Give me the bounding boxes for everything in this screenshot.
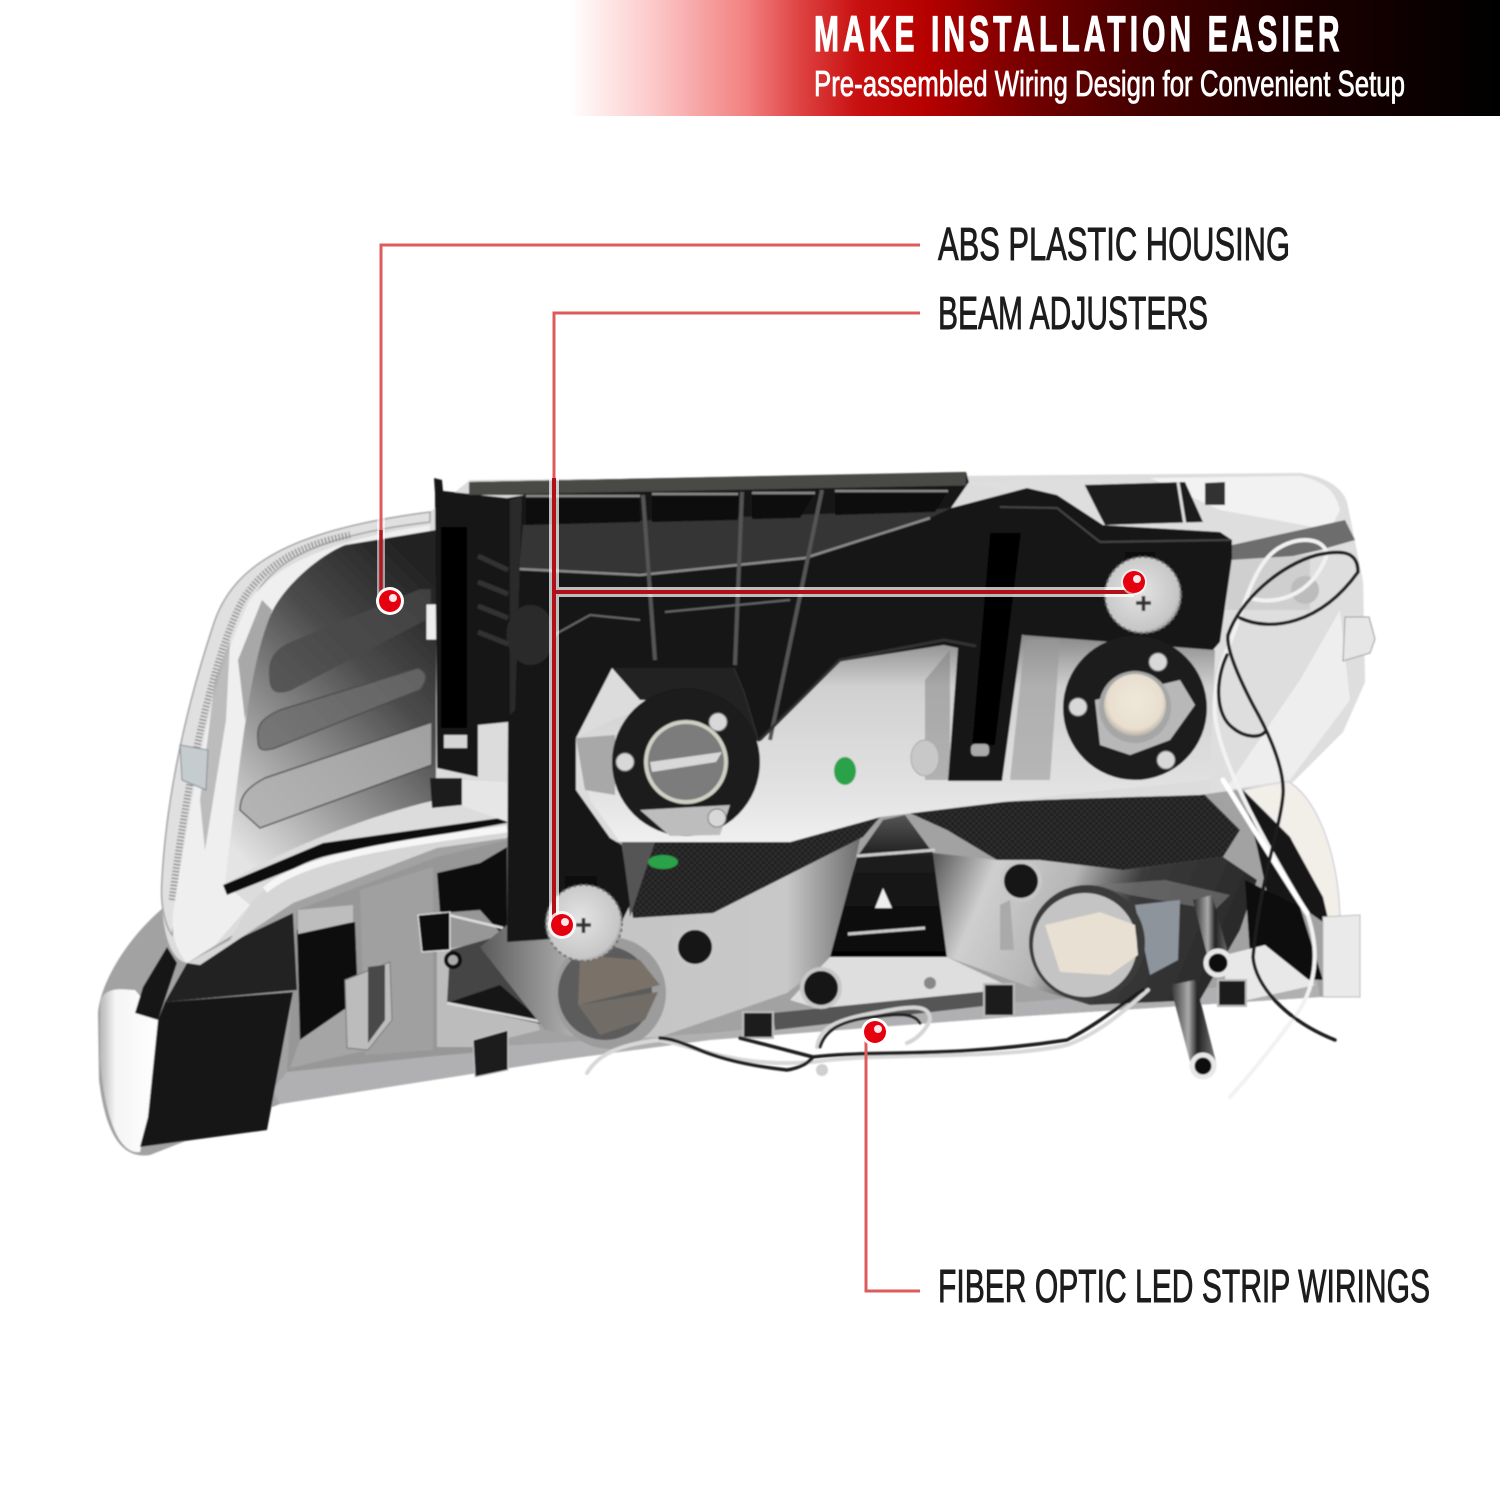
upper right lens xyxy=(960,473,1365,792)
lower cap xyxy=(100,989,160,1152)
upper lamp silhouette xyxy=(162,473,1365,963)
lower-left interior xyxy=(287,840,507,1072)
foam pad xyxy=(140,992,293,1147)
lower lamp bulbs xyxy=(554,885,1145,1049)
adjuster knobs xyxy=(546,552,1181,961)
round ports xyxy=(676,862,1040,1007)
wiring xyxy=(587,540,1358,1097)
middle chrome body xyxy=(576,635,1215,842)
black wire right xyxy=(1228,552,1358,1040)
center pocket xyxy=(830,815,947,957)
center bar xyxy=(790,957,1010,1015)
leader: fiber optic wirings xyxy=(866,1040,920,1291)
lower lamp silhouette xyxy=(98,781,1360,1156)
tubes xyxy=(1170,895,1230,1077)
black gap and silver sweep xyxy=(223,817,507,895)
black bracket xyxy=(434,472,1232,942)
torn tape and silver block xyxy=(430,778,462,808)
housing panel xyxy=(225,530,436,884)
callout lines xyxy=(381,245,1134,1291)
right socket xyxy=(1063,636,1207,780)
clear lens edge xyxy=(162,512,430,935)
headlight product illustration xyxy=(98,472,1375,1156)
lower-left reflector xyxy=(480,825,863,1040)
foam wedge xyxy=(165,913,297,1002)
white wire right xyxy=(1215,540,1327,1097)
bracket ribs xyxy=(519,508,951,573)
leader: ABS plastic housing xyxy=(381,245,920,600)
clips xyxy=(743,980,1246,1038)
lower lamp xyxy=(98,781,1360,1156)
left socket xyxy=(576,688,760,836)
leader: beam adjusters xyxy=(554,313,1134,925)
bottom rim xyxy=(272,980,1320,1104)
right-hand reflector xyxy=(933,853,1257,1005)
label: beam adjusters: BEAM ADJUSTERS xyxy=(938,287,1208,339)
chrome rim xyxy=(173,525,430,963)
header title: MAKE INSTALLATION EASIER xyxy=(814,6,1340,62)
hotspot dots xyxy=(376,569,1147,1046)
right lens and corner xyxy=(1243,781,1340,927)
upper lamp xyxy=(162,472,1375,965)
header banner xyxy=(570,0,1500,116)
label: ABS plastic housing: ABS PLASTIC HOUSING xyxy=(938,218,1290,270)
